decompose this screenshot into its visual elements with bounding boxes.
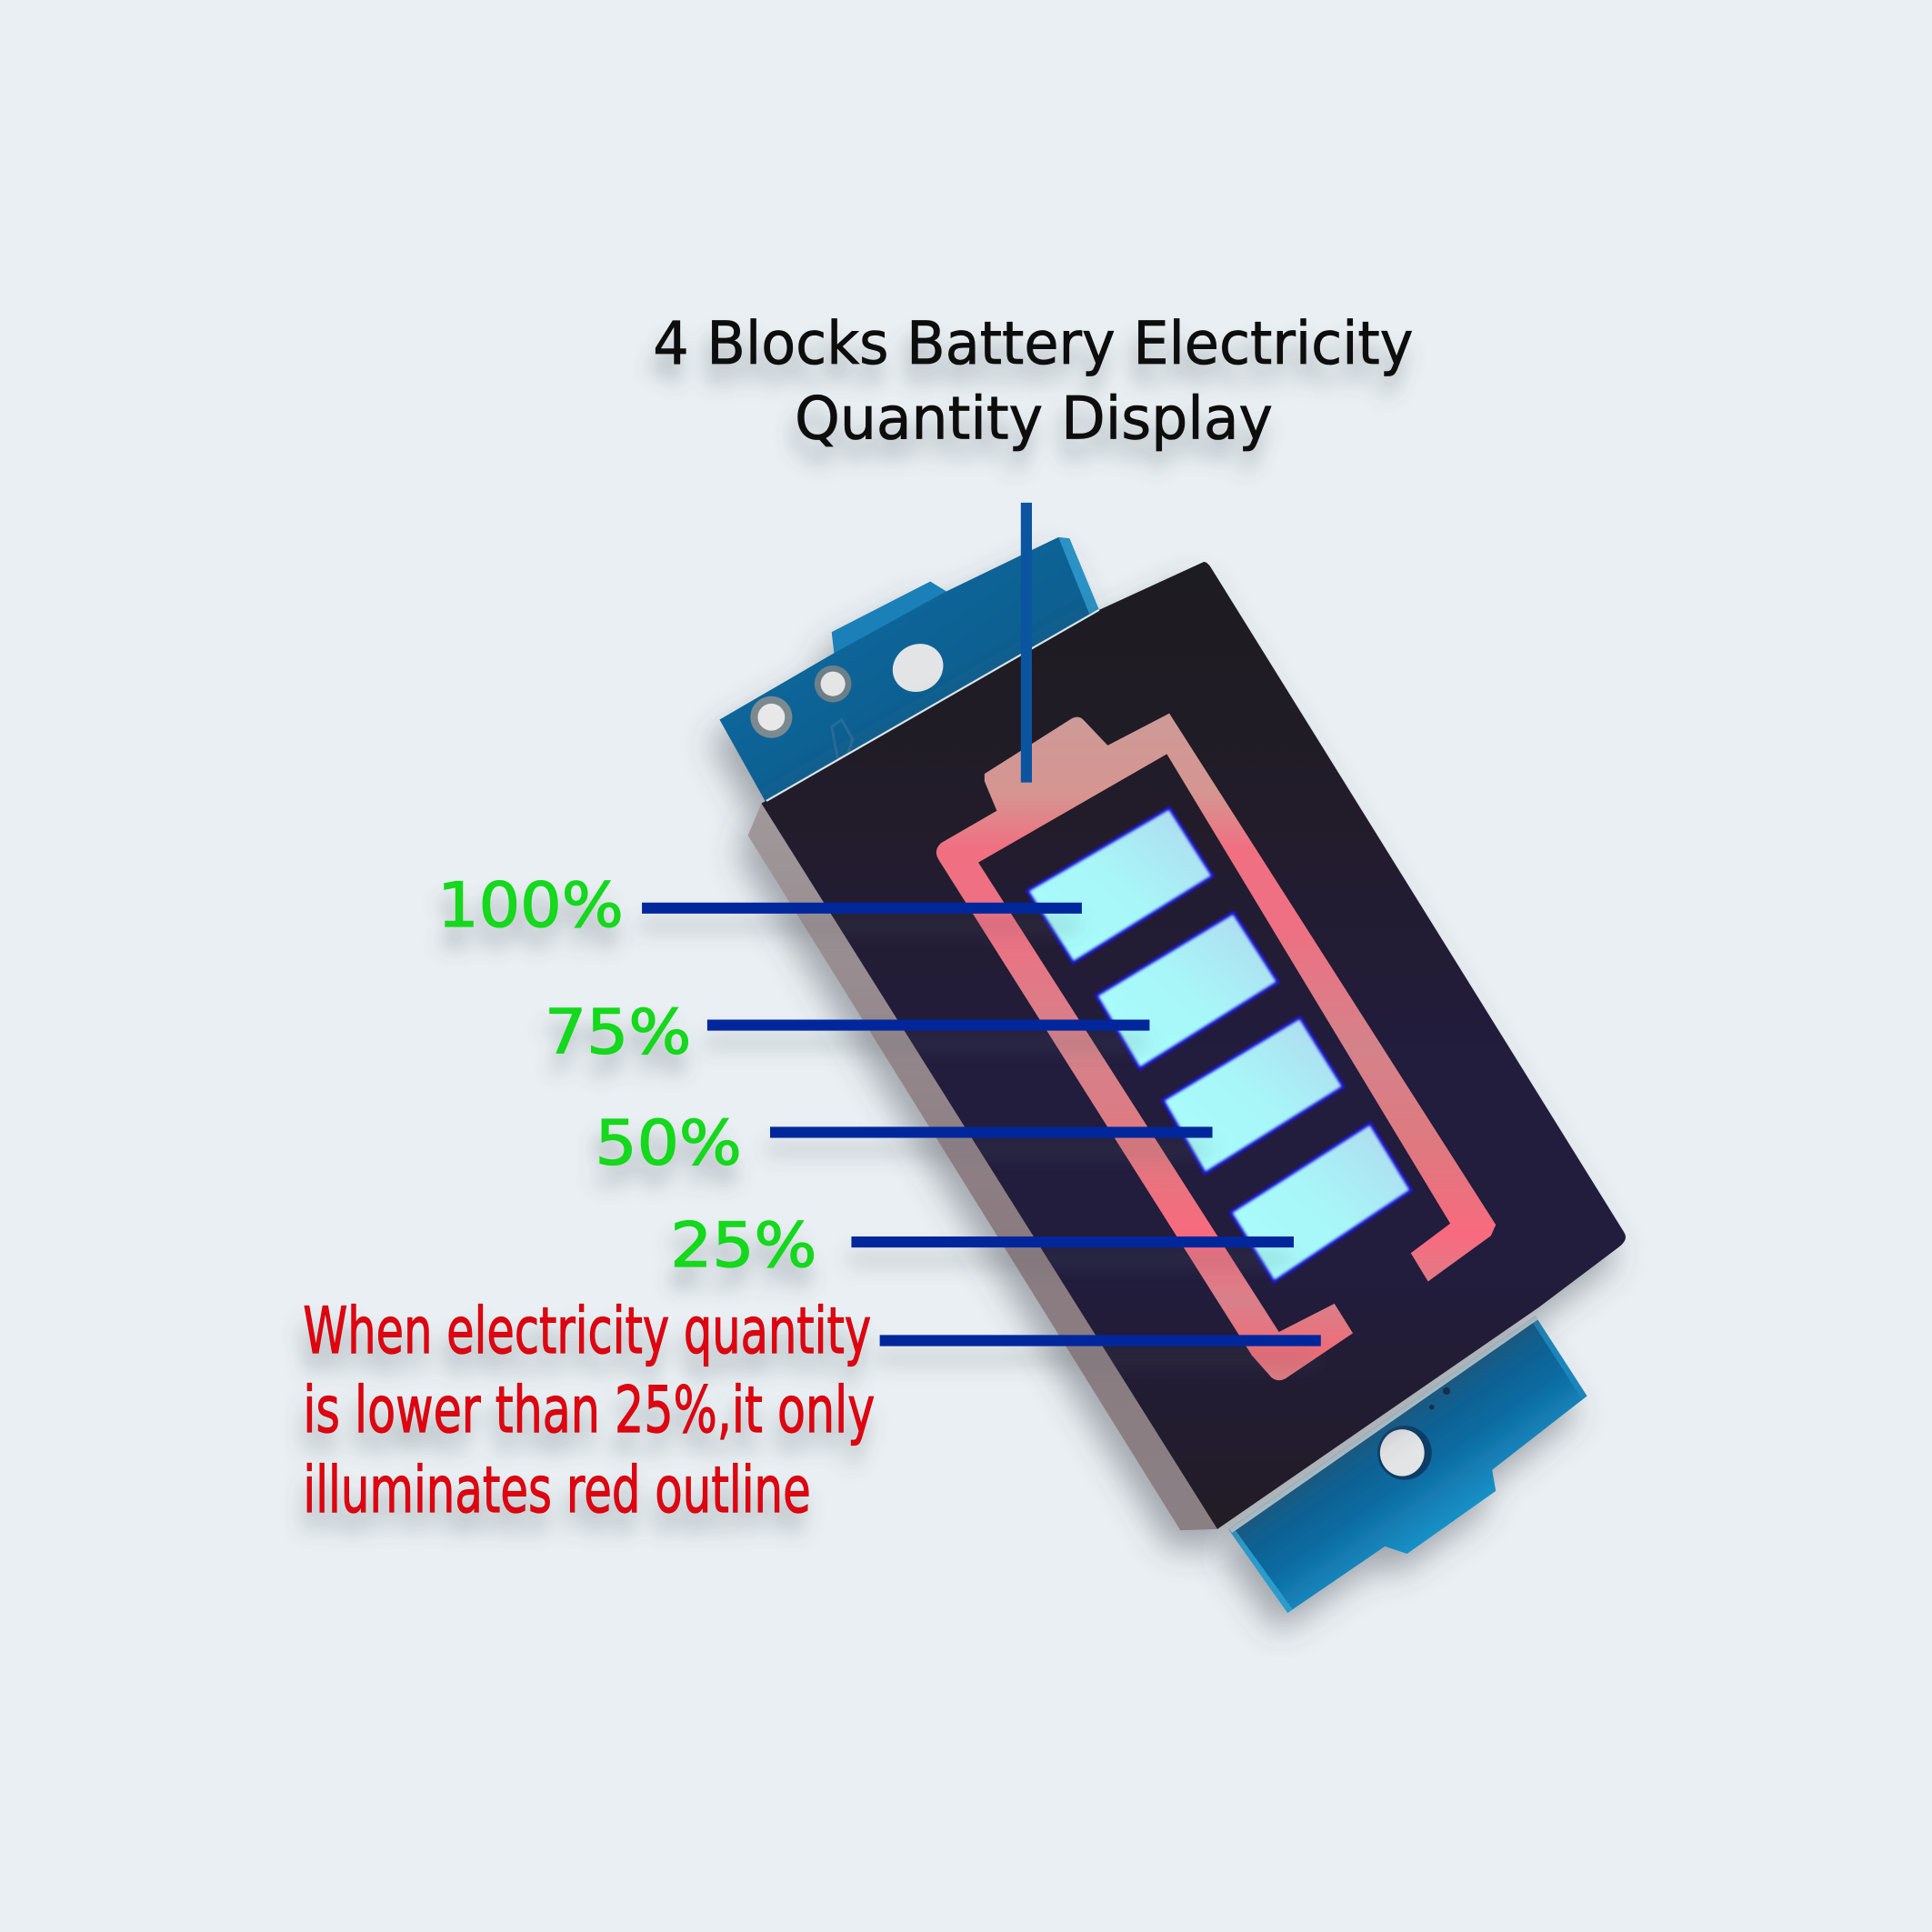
title: Quantity Display [795, 385, 1273, 453]
percent labels [437, 869, 817, 1281]
percent labels: 100% [437, 869, 624, 941]
leader lines [642, 908, 1321, 1340]
block 100% [1027, 808, 1213, 962]
battery module [719, 537, 1626, 1613]
percent labels: 25% [670, 1209, 817, 1281]
charge blocks [1027, 808, 1411, 1281]
bottom PCB tab [1228, 1316, 1587, 1613]
top PCB tab [719, 537, 1099, 804]
red note: is lower than 25%,it only [303, 1373, 875, 1447]
red note [303, 1294, 875, 1527]
title: 4 Blocks Battery Electricity [653, 310, 1413, 378]
block 50% [1163, 1017, 1343, 1173]
block 25% [1231, 1124, 1411, 1281]
mounting holes [750, 635, 952, 759]
red note: When electricity quantity [303, 1294, 871, 1368]
percent labels: 50% [596, 1107, 742, 1179]
block 75% [1096, 913, 1277, 1068]
red battery outline [936, 714, 1496, 1380]
percent labels: 75% [545, 996, 691, 1068]
title [653, 310, 1413, 453]
display body [748, 562, 1626, 1530]
mounting hole [1377, 1387, 1450, 1480]
red note: illuminates red outline [303, 1453, 811, 1527]
leader line to battery outline cap [1022, 503, 1030, 783]
